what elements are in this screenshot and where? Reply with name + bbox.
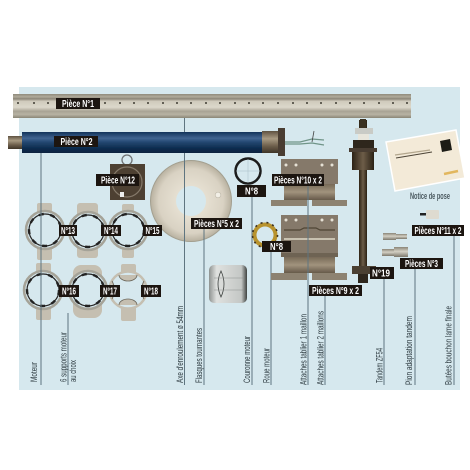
part: Pièce N°12 plate with ring (110, 155, 145, 200)
label: Pièces N°5 x 2: Pièces N°5 x 2 (194, 218, 239, 230)
part: flasque disc (150, 160, 232, 242)
caption: Attaches tablier 2 maillons: Attaches tablier 2 maillons (316, 311, 326, 385)
caption: 6 supports moteur au choix: 6 supports moteur (58, 332, 70, 382)
label: N°14 (101, 225, 121, 237)
label: N°17: N°17 (103, 286, 117, 298)
label: N°16 (59, 285, 79, 298)
part: motor support 13 (26, 203, 64, 260)
label: Pièce N°1: Pièce N°1 (62, 98, 94, 110)
part: couronne ring (236, 158, 260, 184)
label: Pièce N°2 (54, 136, 98, 148)
part: roue star wheel (252, 222, 278, 248)
part: hinge 2 links (271, 215, 347, 280)
part: hinge 1 link (271, 159, 347, 206)
part: end stop pin N°11 (420, 210, 439, 219)
label: N°14: N°14 (104, 225, 118, 237)
label: N°16: N°16 (62, 286, 76, 298)
part: motor support 15 (109, 204, 147, 258)
label: N°8 top: N°8 (245, 186, 258, 198)
label: N°19: N°19 (372, 268, 390, 280)
part: motor support 16 (24, 263, 62, 320)
label: N°8 top (237, 185, 266, 198)
label: Pièces N°9 x 2: Pièces N°9 x 2 (312, 285, 359, 297)
part: motor support 18 (110, 264, 146, 321)
label: Pièces N°3: Pièces N°3 (405, 258, 438, 270)
label: Pièces N°10 x 2 (272, 174, 324, 186)
label: N°18 (141, 285, 161, 298)
caption: Couronne moteur: Couronne moteur (242, 336, 253, 383)
part: tandem pin 1 (383, 233, 407, 240)
label: N°18: N°18 (144, 286, 158, 298)
label: Pièces N°9 x 2 (309, 285, 362, 297)
caption: Axe d'enroulement: Axe d'enroulement ø 54mm (175, 306, 186, 383)
label: N°17 (100, 285, 120, 298)
label: Pièce N°2: Pièce N°2 (60, 136, 93, 148)
rail: Pièce N°1 (13, 94, 411, 118)
caption: Butées bouchon lame finale: Butées bouchon lame finale (444, 306, 454, 385)
caption: 6 supports moteur au choix: au choix (68, 360, 79, 382)
caption: Flasques tournantes: Flasques tournantes (194, 328, 205, 383)
part: motor support 17 (69, 265, 107, 318)
label: Pièce N°12 (96, 174, 139, 186)
label: N°8 wheel: N°8 (270, 241, 283, 253)
caption: 6 supports moteur au choix (58, 332, 79, 382)
caption: Roue moteur: Roue moteur (262, 348, 272, 383)
label: Pièce N°12: Pièce N°12 (101, 174, 135, 186)
label: N°13: N°13 (61, 225, 75, 237)
part: remote control (209, 265, 247, 303)
label: N°8 wheel (262, 241, 291, 253)
caption: Moteur: Moteur (29, 362, 40, 382)
panel: background (19, 87, 460, 390)
document: notice de pose (386, 130, 465, 191)
label: N°15 (143, 225, 162, 237)
caption: Pion adaptation tandem: Pion adaptation tandem (404, 316, 415, 385)
part: tandem ZF54 (349, 119, 377, 283)
caption: Tandem ZF54: Tandem ZF54 (374, 348, 386, 383)
leader lines (41, 108, 454, 385)
part: tandem pin 2 (382, 247, 408, 257)
caption: Attaches tablier 1 maillon: Attaches tablier 1 maillon (298, 314, 310, 385)
label: Pièces N°3 (400, 258, 443, 270)
motor: Pièce N°2 (8, 128, 324, 156)
label: N°13 (59, 225, 77, 237)
part: motor support 14 (69, 203, 107, 258)
label: Pièces N°10 x 2: Pièces N°10 x 2 (274, 174, 322, 186)
label: Pièces N°5 x 2 (191, 218, 242, 230)
label: N°15: N°15 (146, 225, 160, 237)
